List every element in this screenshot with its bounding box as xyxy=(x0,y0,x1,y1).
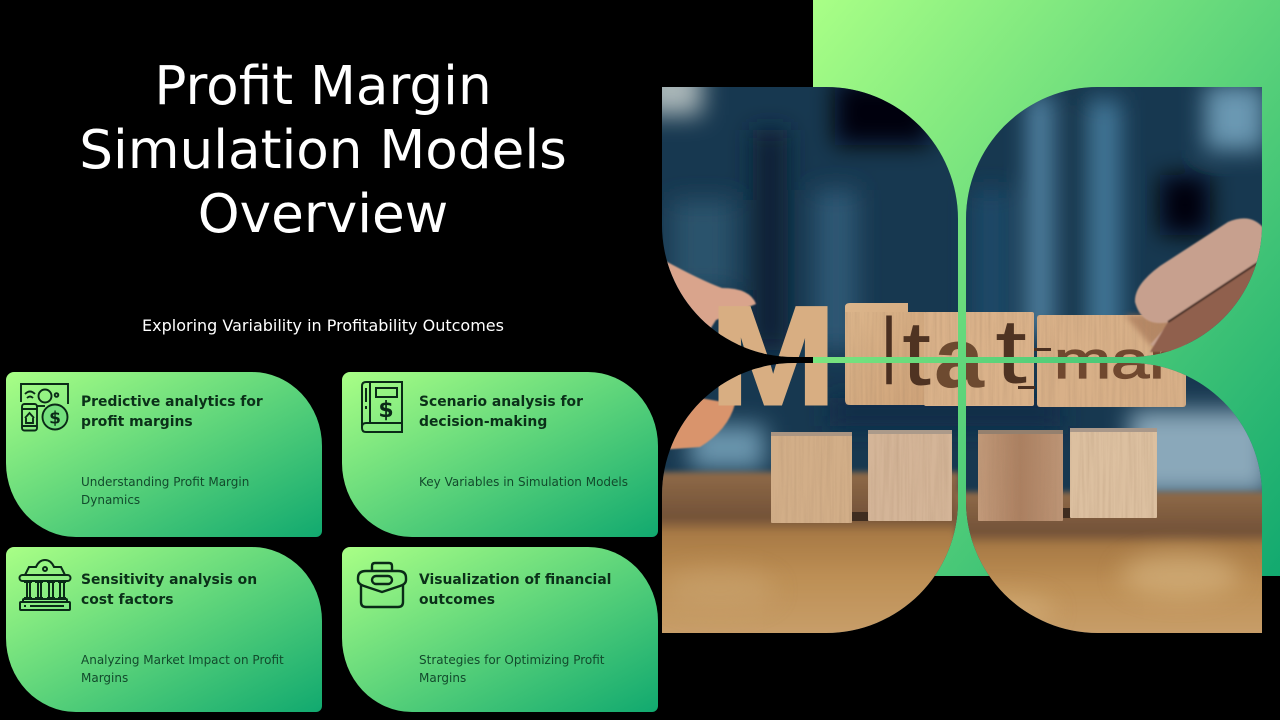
card text: Dynamics xyxy=(81,493,140,507)
block with mar xyxy=(1037,315,1186,407)
engraved letters: l xyxy=(882,299,896,405)
title: Overview xyxy=(198,183,448,245)
card text xyxy=(81,653,284,685)
card heading: outcomes xyxy=(419,592,495,608)
panel: scenario analysis card xyxy=(342,372,658,537)
right hand xyxy=(1135,218,1265,352)
icon: money, phone and coin: $ xyxy=(49,408,61,428)
card heading xyxy=(81,572,257,608)
card heading: decision-making xyxy=(419,414,547,430)
card heading: Visualization of financial xyxy=(419,572,611,588)
graphic panel: green backdrop and petal photo xyxy=(662,0,1280,633)
table surface xyxy=(650,472,1275,642)
block with a and t xyxy=(924,312,1034,406)
upper lettered blocks: a xyxy=(934,311,985,405)
table highlights xyxy=(665,553,1240,625)
upper lettered blocks: mar xyxy=(1054,332,1172,390)
title: Profit Margin xyxy=(154,55,492,117)
card heading: Sensitivity analysis on xyxy=(81,572,257,588)
icon: money, phone and coin xyxy=(20,383,69,432)
card heading: Predictive analytics for xyxy=(81,394,263,410)
title: Simulation Models xyxy=(79,119,567,181)
panel: predictive analytics card xyxy=(6,372,322,537)
subtitle: Exploring Variability in Profitability Outcomes xyxy=(142,316,504,335)
card text: Margins xyxy=(81,671,128,685)
title xyxy=(79,55,567,245)
card text xyxy=(419,653,605,685)
card heading: cost factors xyxy=(81,592,173,608)
icon: bank building xyxy=(18,559,72,611)
card text: Strategies for Optimizing Profit xyxy=(419,653,605,667)
panel: visualization card xyxy=(342,547,658,712)
lower plain blocks xyxy=(771,428,1157,523)
card text: Margins xyxy=(419,671,466,685)
card text: Analyzing Market Impact on Profit xyxy=(81,653,284,667)
panel: sensitivity analysis card xyxy=(6,547,322,712)
card heading xyxy=(81,394,263,430)
upper lettered blocks: t xyxy=(995,301,1027,403)
upper lettered blocks: t xyxy=(902,303,931,405)
upper lettered blocks xyxy=(718,303,1186,407)
wood grain on upper blocks xyxy=(845,312,1186,407)
icon: finance book xyxy=(361,381,403,433)
card text xyxy=(81,475,249,507)
card heading xyxy=(419,572,611,608)
icon: finance book: $ xyxy=(378,398,394,423)
card heading xyxy=(419,394,583,430)
card heading: Scenario analysis for xyxy=(419,394,583,410)
photo: wooden blocks clipped to four petals xyxy=(662,87,1262,633)
green backdrop panel xyxy=(813,0,1280,576)
block with l and t xyxy=(845,303,925,405)
card heading: profit margins xyxy=(81,414,193,430)
left hand xyxy=(660,258,756,450)
icon: briefcase xyxy=(356,562,408,608)
card text: Key Variables in Simulation Models xyxy=(419,475,628,489)
letter block M: M xyxy=(710,277,836,434)
wood grain on lower blocks xyxy=(771,432,1157,523)
card text: Understanding Profit Margin xyxy=(81,475,249,489)
